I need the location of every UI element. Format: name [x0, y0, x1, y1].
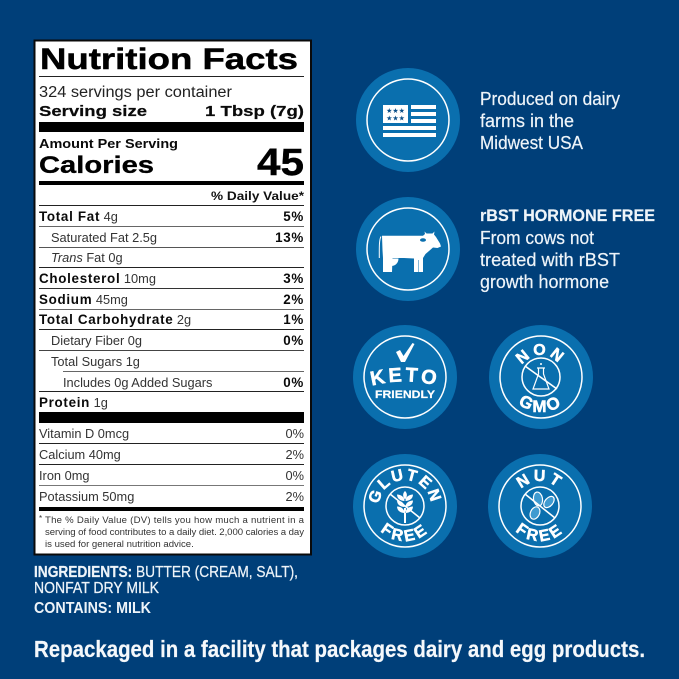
nutrient rows: Includes 0g Added Sugars — [63, 375, 212, 390]
nutrient rows: 13% — [275, 230, 304, 245]
text: rBST hormone free: growth hormone — [480, 272, 609, 292]
ingredients: INGREDIENTS: BUTTER (CREAM, SALT), — [34, 564, 298, 581]
calories row: Calories — [39, 152, 154, 179]
footnote: is used for general nutrition advice. — [45, 539, 194, 550]
nutrient rows: Dietary Fiber 0g — [51, 333, 142, 348]
nutrient rows: Total Carbohydrate 2g — [39, 312, 191, 327]
icon: nut free badge: NUT — [516, 470, 563, 488]
icon: American flag badge: ★★★ — [386, 107, 405, 115]
vitamins and minerals: Calcium 40mg — [39, 447, 121, 462]
nutrient rows: 2% — [283, 292, 304, 307]
allergen statement: CONTAINS: MILK — [34, 600, 152, 617]
nutrient rows — [39, 209, 304, 410]
nutrient rows: Total Fat 4g — [39, 209, 118, 224]
text: rBST hormone free — [480, 206, 655, 292]
vitamins and minerals: Vitamin D 0mcg — [39, 426, 129, 441]
vitamins and minerals: 0% — [286, 426, 304, 441]
text: rBST hormone free: rBST HORMONE FREE — [480, 206, 655, 225]
daily value header: % Daily Value* — [211, 191, 305, 203]
icon: American flag badge — [356, 68, 460, 172]
icon: gluten free badge: GLUTEN — [369, 468, 442, 502]
text: dairy farms: Midwest USA — [480, 133, 583, 153]
vitamins and minerals: Potassium 50mg — [39, 489, 134, 504]
nutrient rows: 0% — [283, 333, 304, 348]
vitamins and minerals: 2% — [286, 489, 304, 504]
icon: keto friendly badge — [353, 325, 457, 429]
text: dairy farms — [480, 89, 620, 153]
amount per serving: Amount Per Serving — [39, 137, 178, 151]
vitamins and minerals: 2% — [286, 447, 304, 462]
nutrient rows: Total Sugars 1g — [51, 354, 140, 369]
icon: gluten free badge — [353, 454, 457, 558]
footnote: The % Daily Value (DV) tells you how much a nutrient in a — [45, 515, 305, 526]
icon: American flag badge: ★★★ — [386, 114, 405, 122]
icon: gluten free badge: FREE — [380, 522, 428, 542]
nutrient rows: 0% — [283, 375, 304, 390]
icon: non-GMO badge: NON — [514, 344, 565, 364]
nutrient rows: 5% — [283, 209, 304, 224]
ingredients: NONFAT DRY MILK — [34, 580, 160, 597]
icon: nut free badge: FREE — [516, 522, 562, 542]
calories row: 45 — [257, 142, 304, 184]
icon: keto friendly badge: KETO — [370, 367, 436, 386]
serving size row: Serving size — [39, 103, 147, 120]
text: rBST hormone free: treated with rBST — [480, 250, 620, 270]
nutrient rows: Saturated Fat 2.5g — [51, 230, 157, 245]
ingredients — [34, 564, 298, 597]
text: dairy farms: Produced on dairy — [480, 89, 620, 109]
nutrient rows: Protein 1g — [39, 395, 108, 410]
icon: non-GMO badge — [489, 325, 593, 429]
heading: Nutrition Facts: Nutrition Facts — [40, 43, 298, 76]
icon: non-GMO badge: GMO — [520, 396, 560, 412]
footnote: * — [39, 514, 42, 523]
vitamins and minerals — [39, 426, 304, 504]
serving size row: 1 Tbsp (7g) — [205, 103, 304, 120]
icon: cow badge — [356, 197, 460, 301]
servings per container: 324 servings per container — [39, 84, 232, 101]
calories row — [39, 142, 304, 184]
vitamins and minerals: Iron 0mg — [39, 468, 90, 483]
nutrient rows: Cholesterol 10mg — [39, 271, 156, 286]
vitamins and minerals: 0% — [286, 468, 304, 483]
text: dairy farms: farms in the — [480, 111, 574, 131]
nutrient rows: 1% — [283, 312, 304, 327]
serving size row — [39, 103, 304, 120]
nutrient rows: 3% — [283, 271, 304, 286]
icon: keto friendly badge: FRIENDLY — [375, 389, 436, 401]
footnote — [39, 514, 305, 550]
nutrient rows: Trans Fat 0g — [51, 250, 123, 265]
text: rBST hormone free: From cows not — [480, 228, 594, 248]
icon: nut free badge — [488, 454, 592, 558]
nutrient rows: Sodium 45mg — [39, 292, 128, 307]
panel: nutrition facts label — [34, 40, 311, 554]
footnote: serving of food contributes to a daily diet. 2,000 calories a day — [45, 527, 304, 538]
